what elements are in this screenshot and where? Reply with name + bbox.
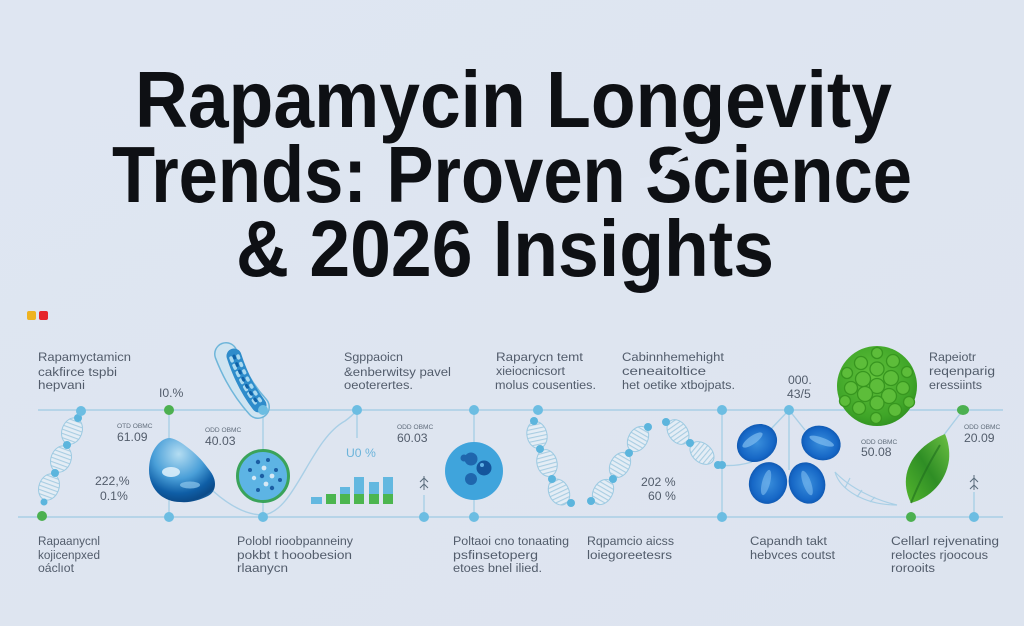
bottom caption 2: Polobl rioobpanneiny bbox=[237, 534, 354, 548]
stat labels: 202 % bbox=[641, 475, 676, 489]
bottom caption 6: rorooits bbox=[891, 561, 935, 575]
stat labels: 60.03 bbox=[397, 431, 428, 445]
stat labels: U0 % bbox=[346, 446, 376, 460]
bottom caption 4 bbox=[587, 534, 674, 562]
bottom caption 4: Rqpamcio aicss bbox=[587, 534, 674, 548]
bottom caption 5: Capandh takt bbox=[750, 534, 828, 548]
title: Rapamycin Longevity bbox=[135, 55, 892, 144]
bottom caption 6: Cellarl rejvenating bbox=[891, 534, 999, 548]
icon: small figure 2 bbox=[970, 475, 978, 490]
bar chart bbox=[311, 477, 393, 504]
top caption 4 bbox=[622, 350, 735, 392]
top caption 4: ceneaitoltice bbox=[622, 364, 706, 378]
stat labels: 43/5 bbox=[787, 387, 811, 401]
top caption 5 bbox=[929, 350, 995, 392]
bottom caption 1 bbox=[38, 534, 100, 575]
top caption 2: oeoterertes. bbox=[344, 378, 413, 392]
icon: DNA wave bbox=[524, 415, 726, 508]
icon: small figure 1 bbox=[420, 476, 428, 490]
bottom caption 5: hebvces coutst bbox=[750, 548, 836, 562]
stat labels: 20.09 bbox=[964, 431, 995, 445]
stat labels: 40.03 bbox=[205, 434, 236, 448]
timeline nodes bbox=[37, 405, 979, 522]
stat labels bbox=[95, 373, 1001, 503]
bottom caption 3: psfinsetoperg bbox=[453, 548, 538, 562]
stat labels: 50.08 bbox=[861, 445, 892, 459]
bottom caption 5 bbox=[750, 534, 836, 562]
bottom caption 2: rlaanycn bbox=[237, 561, 288, 575]
top caption 1: hepvani bbox=[38, 378, 85, 392]
bottom caption 3: Poltaoi cno tonaating bbox=[453, 534, 569, 548]
icon: green leaf bbox=[906, 434, 949, 503]
bottom caption 2: pokbt t hooobesion bbox=[237, 548, 352, 562]
bottom caption 3: etoes bnel ilied. bbox=[453, 561, 542, 575]
icon: green textured sphere bbox=[837, 346, 917, 426]
stat labels: ODD OBMC bbox=[861, 439, 898, 446]
top caption 3: xieiocnicsort bbox=[496, 364, 566, 378]
top caption 4: Cabinnhemehight bbox=[622, 350, 725, 364]
top caption 3 bbox=[495, 350, 596, 392]
top caption 4: het oetike xtbojpats. bbox=[622, 378, 735, 392]
top caption 5: eressiints bbox=[929, 378, 982, 392]
title bbox=[112, 55, 912, 293]
stat labels: ODD OBMC bbox=[964, 424, 1001, 431]
legend squares bbox=[27, 311, 48, 320]
bottom caption 2 bbox=[237, 534, 354, 575]
stat labels: ODD OBMC bbox=[205, 427, 242, 434]
icon: molecule circle bbox=[445, 442, 503, 500]
top caption 3: Raparycn temt bbox=[496, 350, 584, 364]
bottom caption 4: loiegoreetesrs bbox=[587, 548, 672, 562]
icon: cell circle with green ring bbox=[238, 450, 288, 502]
icon: blue droplet bbox=[149, 438, 215, 502]
top caption 2: &enberwitsy pavel bbox=[344, 365, 451, 379]
bottom caption 6: reloctes rjoocous bbox=[891, 548, 988, 562]
top caption 1 bbox=[38, 350, 131, 392]
top caption 2: Sgppaoicn bbox=[344, 350, 403, 364]
icon: DNA helix left bbox=[35, 414, 86, 506]
stat labels: I0.% bbox=[159, 386, 184, 400]
top caption 5: Rapeiotr bbox=[929, 350, 976, 364]
stat labels: 60 % bbox=[648, 489, 676, 503]
bottom caption 1: Rapaanycnl bbox=[38, 534, 100, 548]
stat labels: ODD OBMC bbox=[397, 424, 434, 431]
icon: blue capsules bbox=[729, 416, 846, 509]
stat labels: 61.09 bbox=[117, 430, 148, 444]
bottom caption 3 bbox=[453, 534, 569, 575]
stat labels: 0.1% bbox=[100, 489, 128, 503]
timeline rails bbox=[18, 410, 1003, 517]
icon: mitochondrion capsule bbox=[226, 354, 262, 407]
title: & 2026 Insights bbox=[236, 204, 774, 293]
icon: pale leaf outline bbox=[835, 472, 897, 505]
top caption 3: molus cousenties. bbox=[495, 378, 596, 392]
top caption 5: reqenparig bbox=[929, 364, 995, 378]
bottom caption 1: oáclıot bbox=[38, 561, 75, 575]
stat labels: 222,% bbox=[95, 474, 130, 488]
top caption 1: Rapamyctamicn bbox=[38, 350, 131, 364]
bottom caption 1: kojicenpxed bbox=[38, 548, 100, 562]
top caption 1: cakfirce tspbi bbox=[38, 365, 117, 379]
stat labels: OTD OBMC bbox=[117, 423, 153, 430]
bottom caption 6 bbox=[891, 534, 999, 575]
title: Trends: Proven Science bbox=[112, 130, 912, 219]
top caption 2 bbox=[344, 350, 451, 392]
stat labels: 000. bbox=[788, 373, 812, 387]
